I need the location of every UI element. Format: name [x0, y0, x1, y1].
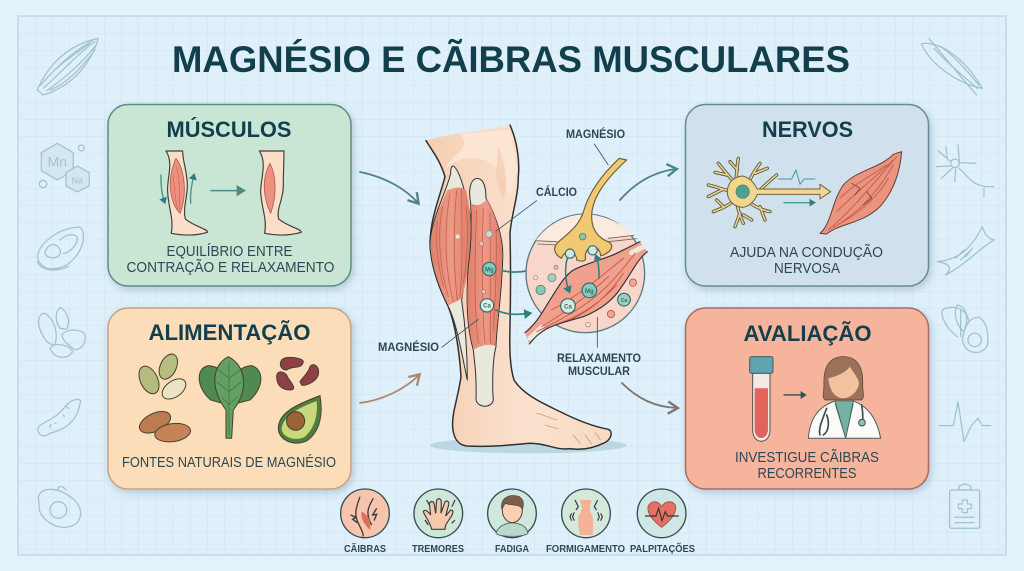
labels on leg diagram: MUSCULAR	[568, 366, 631, 378]
label: tremores: TREMORES	[412, 544, 464, 555]
ions and arrows	[565, 249, 575, 258]
arrow: leg to avaliação	[622, 383, 677, 408]
heading: alimentação: ALIMENTAÇÃO	[148, 320, 310, 345]
arrow: alimentação to leg	[360, 375, 419, 403]
labels on leg diagram	[378, 128, 641, 378]
text: músculos caption: CONTRAÇÃO E RELAXAMENTO	[126, 259, 334, 276]
labels on leg diagram: CÁLCIO	[536, 186, 577, 199]
label: formigamento: FORMIGAMENTO	[546, 544, 625, 555]
text: nervos caption: AJUDA NA CONDUÇÃO	[730, 244, 883, 261]
central leg anatomy	[426, 125, 647, 453]
icon: neuron	[937, 145, 994, 197]
text: músculos caption: EQUILÍBRIO ENTRE	[166, 243, 293, 260]
inset: neuromuscular junction	[525, 158, 647, 344]
muscle: soleus with ions: Mg	[485, 268, 494, 274]
icon: muscle bundle	[921, 38, 982, 95]
heading: avaliação: AVALIAÇÃO	[744, 321, 872, 346]
inset: neuromuscular junction: Ca	[621, 298, 627, 304]
arrow: músculos to leg	[360, 172, 418, 203]
labels on leg diagram: RELAXAMENTO	[557, 353, 641, 365]
icon: sliced food	[37, 227, 84, 270]
icon: cãibras	[341, 489, 389, 538]
foot detail	[537, 413, 601, 444]
ground shadow	[430, 437, 627, 453]
text: músculos caption	[126, 243, 334, 276]
right decorative icons	[921, 38, 994, 528]
leader lines	[442, 144, 608, 347]
icon: fadiga	[488, 489, 536, 538]
panel: alimentação	[108, 308, 351, 489]
icon: leaves and fruit	[38, 307, 85, 357]
heading: nervos: NERVOS	[762, 117, 853, 142]
inset: neuromuscular junction: Mg	[585, 289, 594, 295]
icon: DNA helix	[937, 227, 994, 275]
heading: músculos: MÚSCULOS	[166, 117, 292, 142]
illustration: blood test and doctor	[750, 357, 881, 441]
title: MAGNÉSIO E CÃIBRAS MUSCULARES	[172, 38, 850, 80]
arrow: leg to nervos	[620, 169, 676, 200]
text: avaliação caption: RECORRENTES	[758, 466, 856, 482]
symptom icons row	[341, 489, 695, 555]
inset: neuromuscular junction: Ca	[564, 304, 572, 310]
label: fadiga: FADIGA	[495, 544, 529, 555]
text: alimentação caption: FONTES NATURAIS DE MAGNÉSIO	[122, 454, 336, 471]
arrow: ca into inset	[496, 310, 530, 314]
leg skin and outline	[426, 125, 611, 449]
icon: tremores	[414, 489, 463, 538]
label: palpitações: PALPITAÇÕES	[630, 542, 695, 555]
labels on leg diagram: MAGNÉSIO	[566, 128, 625, 141]
nerve terminal	[555, 158, 627, 261]
text: nervos caption	[730, 244, 883, 277]
text: nervos caption: NERVOSA	[774, 261, 840, 277]
labels on leg diagram: MAGNÉSIO	[378, 341, 439, 354]
muscle: gastrocnemius	[430, 166, 472, 380]
icon: mineral hexagons	[39, 143, 89, 192]
panel: músculos	[108, 104, 351, 286]
illustration: neuron signal reaching muscle	[708, 152, 902, 234]
muscle: soleus with ions: Ca	[483, 304, 491, 310]
icon: sweet potato	[38, 399, 81, 436]
illustration: foods rich in magnesium	[135, 351, 321, 444]
panel: avaliação	[686, 308, 928, 489]
icon: formigamento	[562, 489, 610, 538]
left decorative icons	[37, 38, 98, 527]
icon: heartbeat line	[939, 402, 991, 442]
icon: avocado outline	[38, 487, 81, 527]
muscle: soleus with ions	[467, 178, 503, 406]
icon: mineral hexagons: Mn	[48, 154, 67, 170]
muscle fibre	[525, 242, 647, 344]
icon: clipboard	[950, 484, 980, 528]
icon: muscle outline	[37, 38, 98, 95]
panel: nervos	[686, 104, 928, 286]
text: avaliação caption: INVESTIGUE CÃIBRAS	[735, 449, 879, 466]
label: cãibras: CÃIBRAS	[344, 542, 386, 555]
arrows between panels and leg	[360, 169, 677, 408]
icon: leaf and avocado	[942, 305, 988, 353]
arrow: mg into inset	[503, 265, 544, 272]
illustration: calf contraction to relaxation	[161, 151, 301, 235]
icon: palpitações	[637, 489, 686, 538]
icon: mineral hexagons: Na	[72, 175, 83, 185]
text: avaliação caption	[735, 449, 879, 482]
